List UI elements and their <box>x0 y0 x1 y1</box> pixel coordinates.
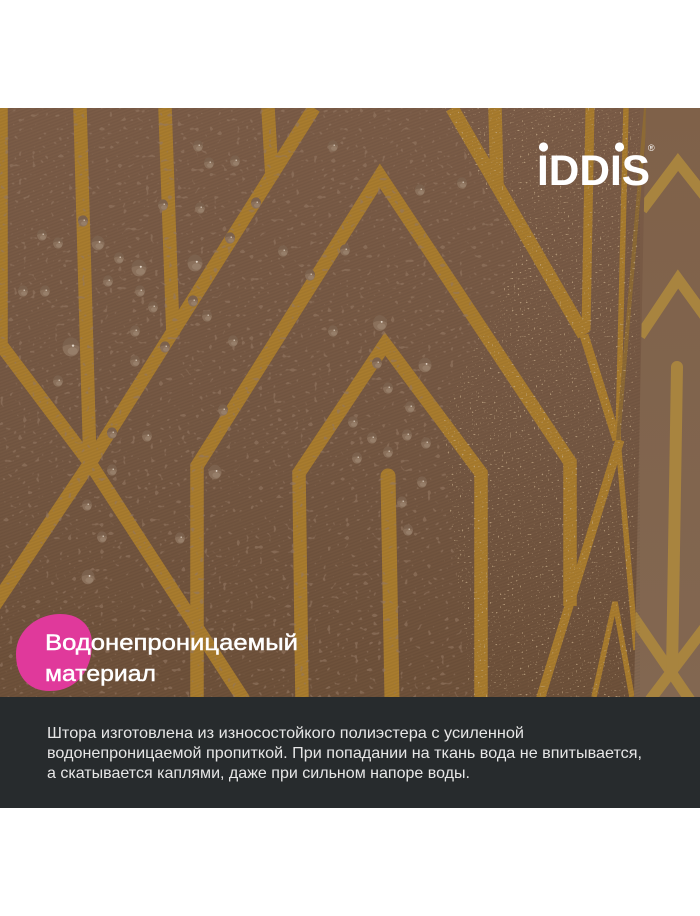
large water droplets <box>18 140 467 584</box>
gold geometric pattern on fabric <box>0 108 646 700</box>
heading: Водонепроницаемый <box>45 630 298 655</box>
logo: IDDIS: ® <box>648 143 655 153</box>
pink accent blob <box>16 614 92 691</box>
panel: photo of wet curtain fabric <box>0 108 700 700</box>
side panel: out-of-focus curtain fold <box>634 153 700 697</box>
fabric base <box>0 108 700 697</box>
fabric weave texture <box>0 108 640 697</box>
description text: Штора изготовлена из износостойкого полиэстера с усиленной <box>47 725 524 742</box>
logo: IDDIS: IDDIS <box>537 147 650 195</box>
description text <box>47 725 642 782</box>
heading: материал <box>45 661 156 686</box>
small water droplets <box>0 108 514 697</box>
fine water speckles <box>440 108 640 697</box>
infographic canvas <box>0 108 700 808</box>
description text: а скатывается каплями, даже при сильном напоре воды. <box>47 765 470 782</box>
panel: description <box>0 697 700 808</box>
heading <box>45 630 298 686</box>
description text: водонепроницаемой пропиткой. При попадании на ткань вода не впитывается, <box>47 745 642 762</box>
